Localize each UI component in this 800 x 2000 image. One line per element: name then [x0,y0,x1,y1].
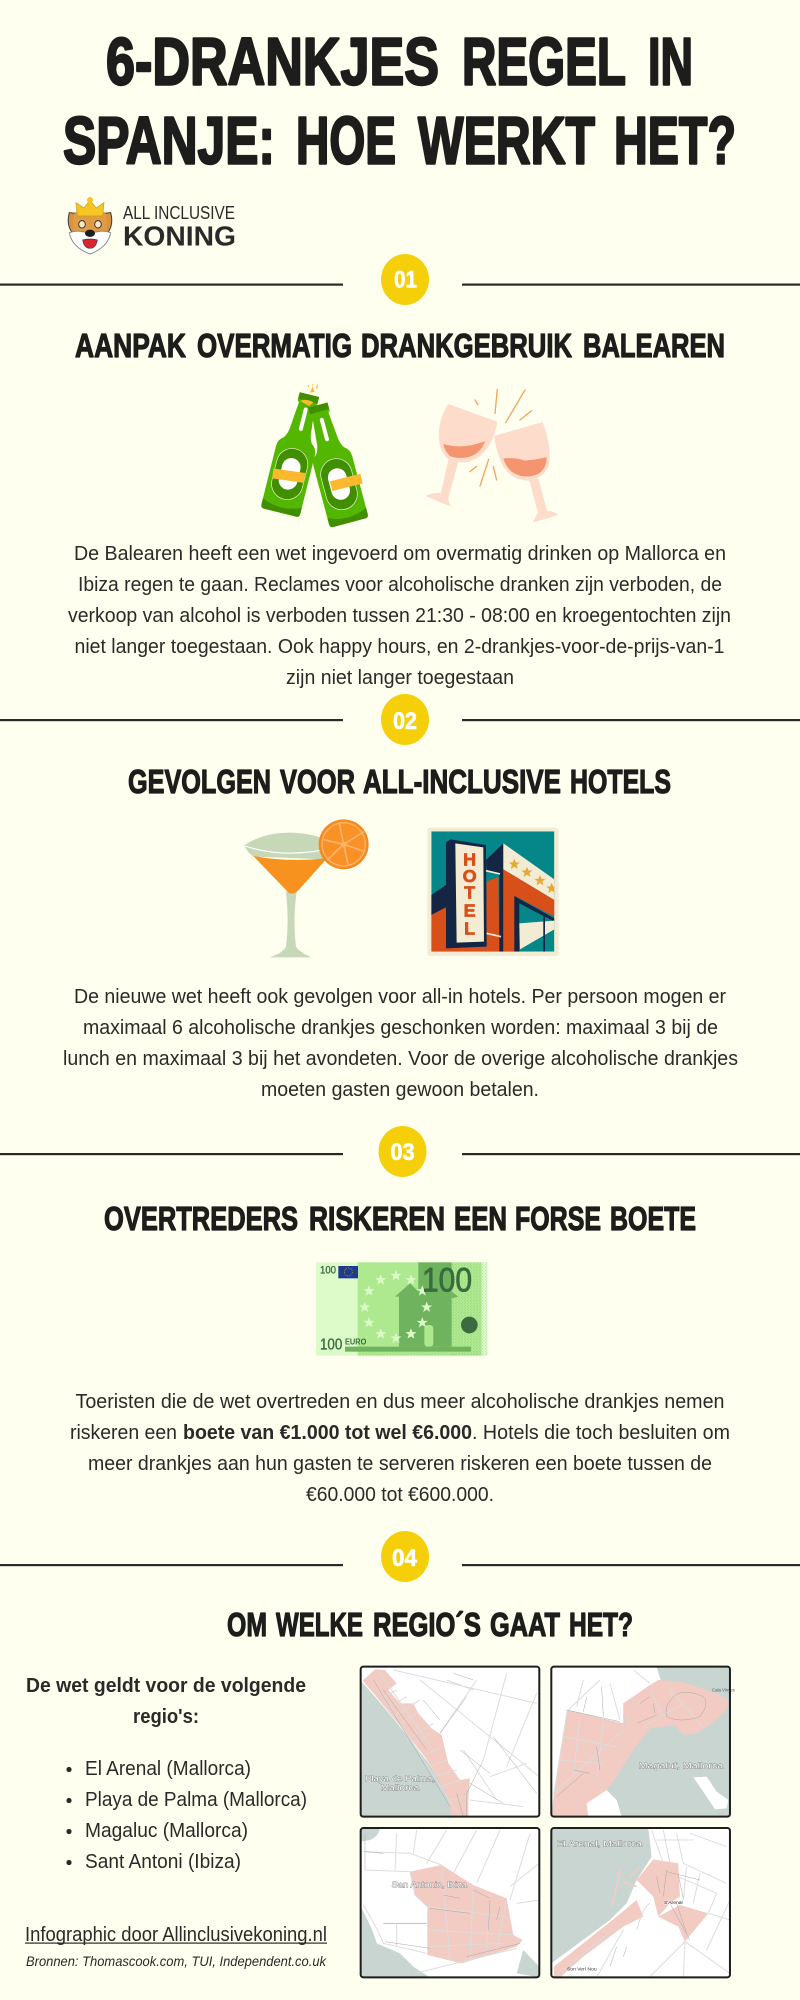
logo text [123,203,236,252]
regions list: Playa de Palma (Mallorca) [85,1789,307,1811]
paragraph 3: boete van €1.000 tot wel €6.000 [183,1422,472,1444]
paragraph 3: €60.000 tot €600.000. [306,1484,494,1506]
map: Playa de Palma: Mallorca [381,1782,420,1792]
heading 1: OVERMATIG [197,328,352,365]
heading 3: BOETE [610,1201,696,1238]
logo: All Inclusive Koning [68,197,236,254]
section marker 04: 04 [392,1545,418,1572]
icon: fox with crown [68,197,112,254]
title: HET? [614,104,736,178]
paragraph 2 [63,986,738,1101]
regions list: El Arenal (Mallorca) [85,1758,251,1780]
title: IN [648,24,693,100]
heading 2: GEVOLGEN [128,764,271,801]
regions list: Magaluc (Mallorca) [85,1820,248,1842]
heading 3: EEN [454,1201,507,1238]
map: San Antonio: San Antonio, Ibiza [392,1880,467,1890]
regions list: Sant Antoni (Ibiza) [85,1851,241,1873]
logo text: ALL INCLUSIVE [123,203,235,223]
regions intro: regio's: [133,1706,199,1728]
map: El Arenal: S'Arenal [664,1900,683,1906]
title [63,24,736,178]
map: Magaluf: Cala Vinyes [712,1688,735,1693]
logo text: KONING [123,220,236,252]
icon: 100 euro banknote: 100 [422,1262,472,1300]
paragraph 3: riskeren een [70,1422,177,1444]
paragraph 1 [68,543,731,689]
map: San Antonio [361,1828,540,1977]
icon: 100 euro banknote: EURO [345,1338,366,1347]
heading 2: VOOR [280,764,355,801]
icon: clinking wine glasses [426,389,558,523]
paragraph 1: Ibiza regen te gaan. Reclames voor alcoholische dranken zijn verboden, de [78,574,722,596]
icon: 100 euro banknote: 100 [320,1264,336,1276]
regions intro: De wet geldt voor de volgende [26,1675,306,1697]
heading 2: HOTELS [570,764,671,801]
section marker 03 [0,1126,800,1177]
section marker 02 [0,694,800,745]
heading 4: OM [227,1607,267,1644]
heading 3: RISKEREN [309,1201,445,1238]
paragraph 3 [70,1391,730,1506]
paragraph 1: De Balearen heeft een wet ingevoerd om overmatig drinken op Mallorca en [74,543,726,565]
section marker 04 [0,1531,800,1582]
regions intro [26,1675,306,1728]
heading 4 [227,1607,633,1644]
heading 2 [128,764,671,801]
map: El Arenal: Son Verí Nou [567,1967,597,1973]
icon: cocktail with orange slice [244,819,369,957]
heading 4: HET? [569,1607,633,1644]
heading 4: WELKE [276,1607,363,1644]
paragraph 2: lunch en maximaal 3 bij het avondeten. Voor de overige alcoholische drankjes [63,1048,738,1070]
section marker 03: 03 [390,1139,414,1166]
paragraph 1: zijn niet langer toegestaan [286,667,514,689]
regions list [66,1758,307,1873]
heading 2: ALL-INCLUSIVE [363,764,561,801]
paragraph 1: niet langer toegestaan. Ook happy hours, en 2-drankjes-voor-de-prijs-van-1 [74,636,724,658]
heading 1: AANPAK [75,328,186,365]
title: HOE [296,104,396,178]
heading 3: FORSE [515,1201,601,1238]
icon: 100 euro banknote [316,1262,488,1356]
section marker 01 [0,254,800,305]
map: Magaluf: Magaluf, Mallorca [639,1760,724,1770]
map: El Arenal: El Arenal, Mallorca [557,1839,642,1849]
paragraph 3: . Hotels die toch besluiten om [472,1422,730,1444]
title: SPANJE: [63,104,275,178]
title: 6-DRANKJES [106,24,439,100]
icon: 100 euro banknote: 100 [320,1336,342,1353]
section marker 01: 01 [394,266,417,294]
heading 3 [104,1201,696,1238]
section marker 02: 02 [393,708,417,735]
credit line: Infographic door Allinclusivekoning.nl [25,1924,327,1946]
heading 4: GAAT [490,1607,560,1644]
map: Playa de Palma [361,1667,539,1817]
paragraph 3: Toeristen die de wet overtreden en dus meer alcoholische drankjes nemen [76,1391,724,1413]
icon: retro hotel sign: HOTEL [463,849,477,939]
map: Playa de Palma: Playa de Palma, [365,1774,435,1784]
paragraph 1: verkoop van alcohol is verboden tussen 21:30 - 08:00 en kroegentochten zijn [68,605,731,627]
heading 4: REGIO´S [373,1607,481,1644]
paragraph 2: moeten gasten gewoon betalen. [261,1079,539,1101]
map: El Arenal [551,1828,730,1977]
paragraph 3: meer drankjes aan hun gasten te serveren riskeren een boete tussen de [88,1453,712,1475]
title: REGEL [462,24,626,100]
icon: clinking beer bottles [261,383,369,528]
heading 1: BALEAREN [583,328,725,365]
sources: Bronnen: Thomascook.com, TUI, Independent.co.uk [26,1953,327,1969]
heading 3: OVERTREDERS [104,1201,298,1238]
paragraph 2: maximaal 6 alcoholische drankjes geschonken worden: maximaal 3 bij de [83,1017,718,1039]
icon: retro hotel sign [427,828,559,956]
map: Magaluf [551,1667,735,1817]
paragraph 2: De nieuwe wet heeft ook gevolgen voor all-in hotels. Per persoon mogen er [74,986,726,1008]
title: WERKT [418,104,595,178]
heading 1: DRANKGEBRUIK [361,328,572,365]
heading 1 [75,328,725,365]
